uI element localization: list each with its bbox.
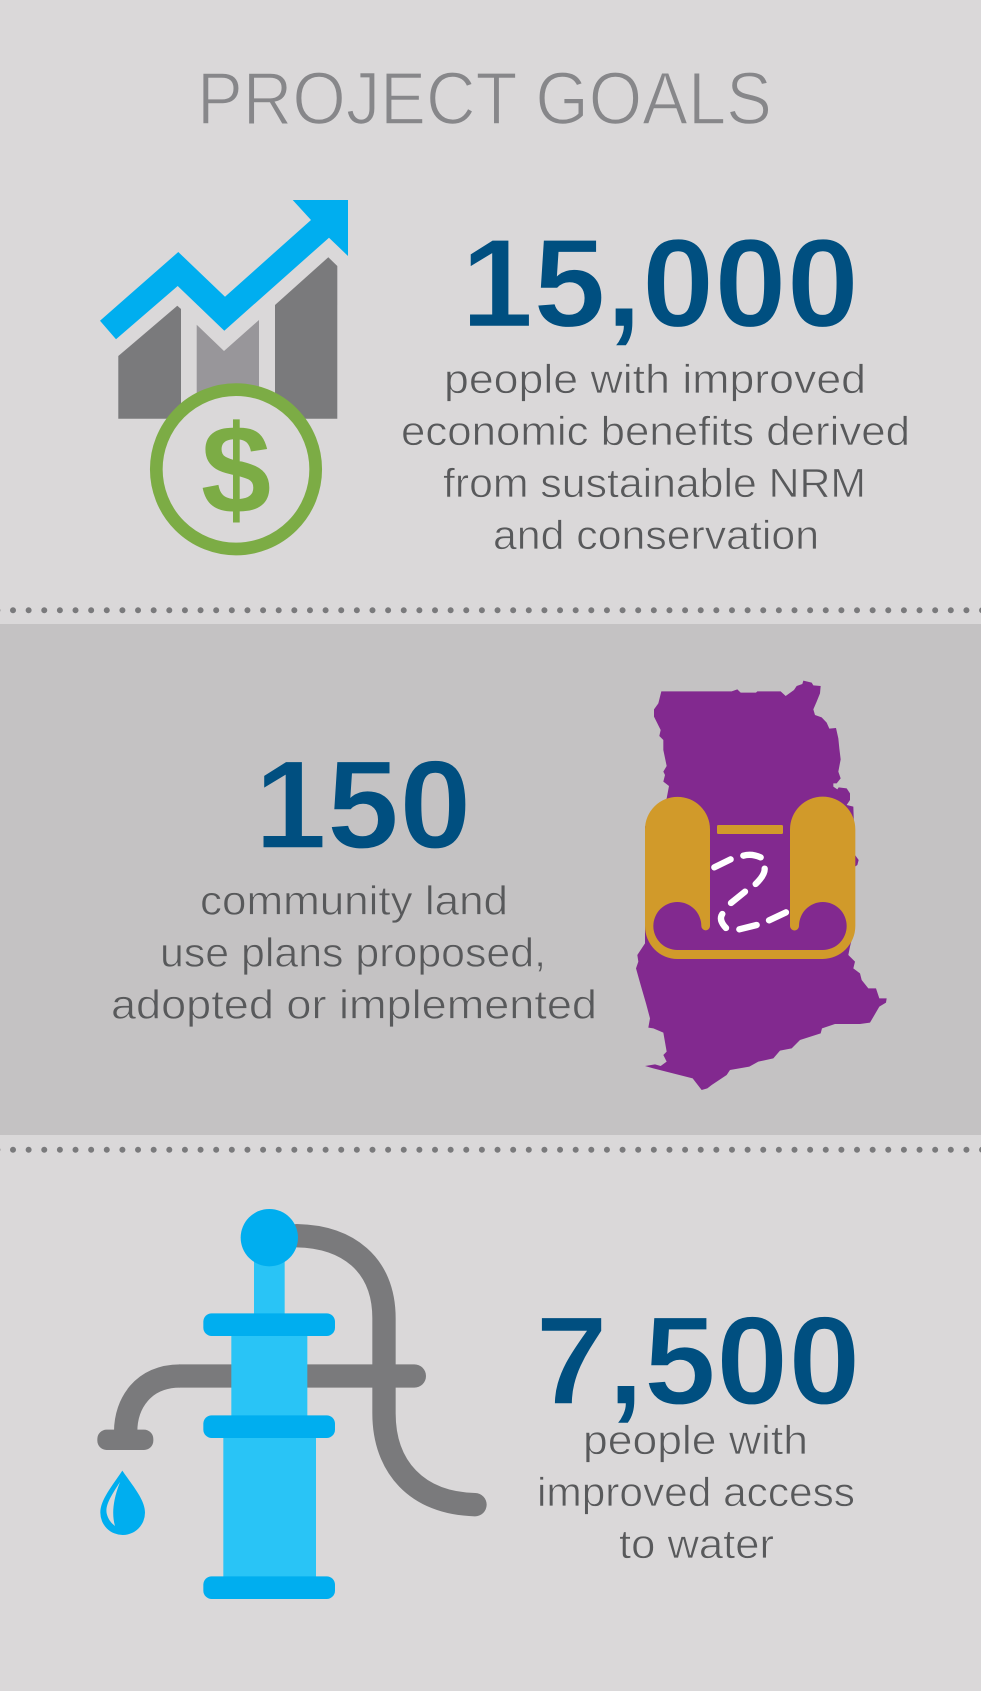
description: water access: people with <box>583 1417 808 1463</box>
panel: water access <box>97 1209 861 1599</box>
dollar coin: $ <box>201 399 271 540</box>
panel: economic benefits <box>100 200 910 558</box>
description: land use plans <box>111 878 597 1028</box>
spout pipe <box>97 1376 414 1450</box>
water drop <box>100 1471 145 1535</box>
description: water access <box>537 1417 855 1567</box>
icon: water pump <box>97 1209 475 1599</box>
dashed route <box>714 855 786 929</box>
pump body <box>203 1209 335 1599</box>
description: economic benefits: people with improved <box>444 356 866 402</box>
description: economic benefits <box>401 356 910 558</box>
scroll <box>645 797 855 959</box>
dollar coin <box>156 390 316 549</box>
stat: 7,500: 7,500 <box>536 1290 860 1431</box>
stat: 15,000: 15,000 <box>461 212 859 354</box>
panel: land use plans <box>111 681 887 1090</box>
description: water access: improved access <box>537 1469 855 1515</box>
description: economic benefits: from sustainable NRM <box>443 460 866 506</box>
scroll heading bar <box>717 825 783 834</box>
description: land use plans: community land <box>200 878 508 924</box>
chart bars <box>118 257 337 420</box>
description: economic benefits: economic benefits derived <box>401 408 910 454</box>
stat: 150: 150 <box>254 734 472 875</box>
icon: Ghana map with scroll <box>636 681 887 1090</box>
description: water access: to water <box>619 1521 774 1567</box>
description: land use plans: use plans proposed, <box>160 930 546 976</box>
map of Ghana <box>636 681 887 1090</box>
pump handle <box>297 1236 475 1505</box>
description: economic benefits: and conservation <box>493 512 819 558</box>
description: land use plans: adopted or implemented <box>111 982 597 1028</box>
title: PROJECT GOALS <box>197 57 772 140</box>
rising arrow <box>100 200 348 339</box>
icon: rising chart with dollar coin <box>100 200 348 549</box>
